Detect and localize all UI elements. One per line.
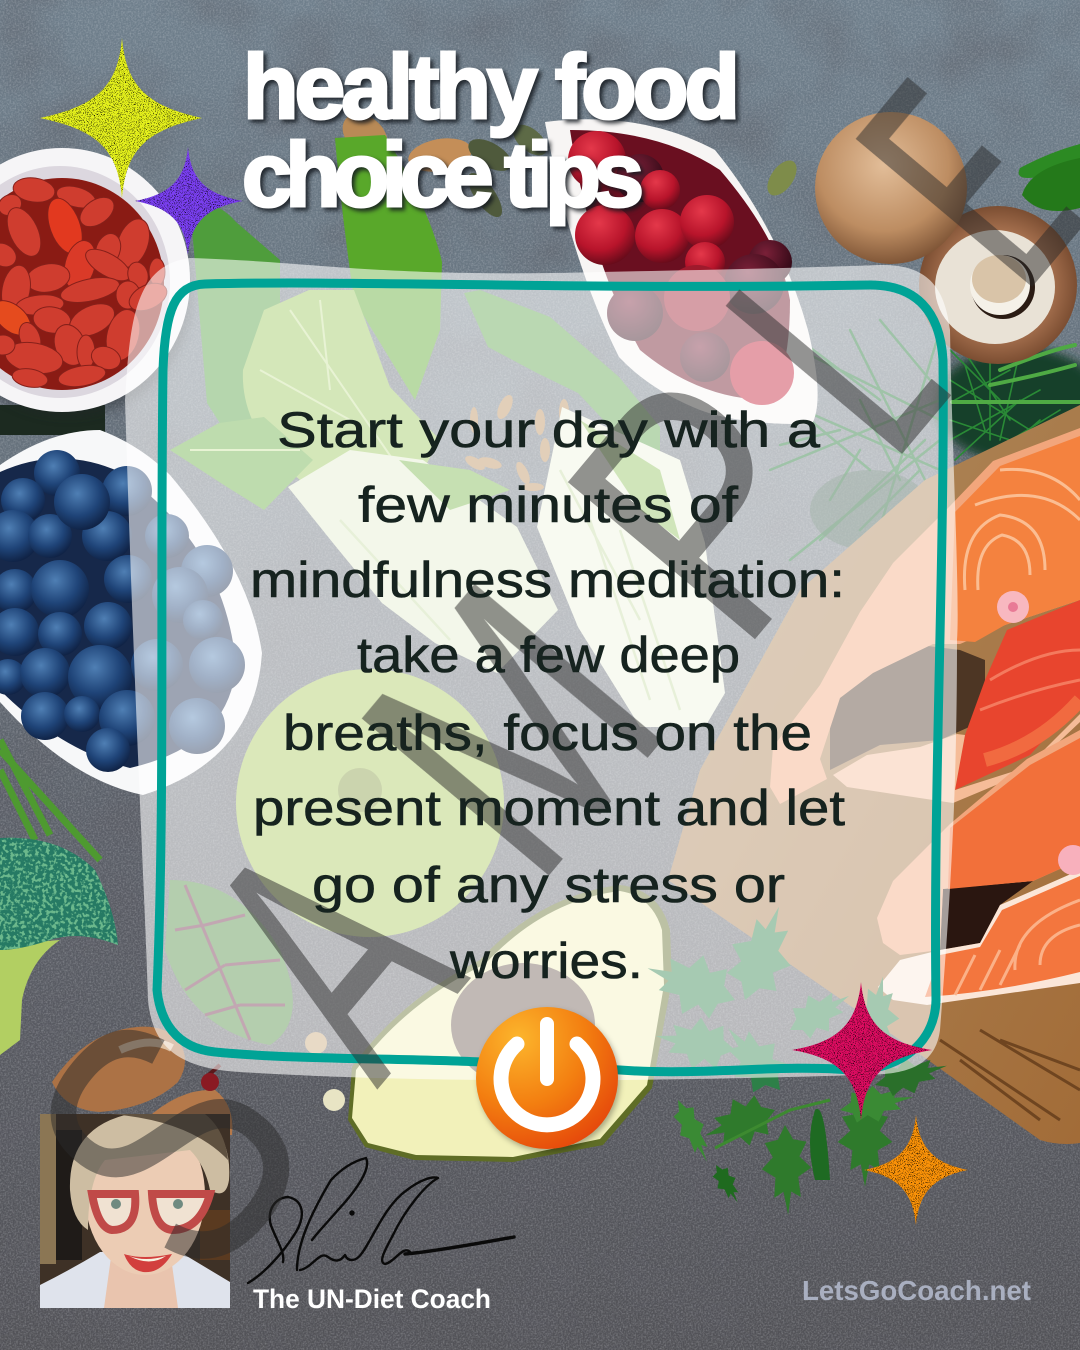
- watermark: SAMPLE: M: [289, 518, 734, 941]
- food: blueberry bowl: [0, 430, 262, 795]
- title: [242, 37, 740, 226]
- panel: frosted translucent card: [125, 258, 958, 1080]
- icon: purple sparkle: [135, 147, 243, 255]
- body text: mindfulness tip: breaths, focus on the: [283, 705, 812, 761]
- icon: power button: [476, 1007, 618, 1149]
- signature: [248, 1158, 514, 1283]
- icon: yellow sparkle: [40, 38, 202, 198]
- food: avocado: [305, 885, 672, 1162]
- food: seeds: [463, 393, 569, 491]
- body text: mindfulness tip: [250, 402, 845, 989]
- author label: The UN-Diet Coach: [253, 1284, 491, 1314]
- body text: mindfulness tip: present moment and let: [253, 780, 845, 836]
- food: parsley: [637, 896, 952, 1216]
- food: salmon steaks: [770, 428, 1080, 1005]
- portrait photo: [40, 1114, 230, 1308]
- body text: mindfulness tip: Start your day with a: [277, 402, 820, 458]
- food: almonds and pumpkin seeds: [334, 105, 802, 222]
- food: apple: [236, 669, 504, 937]
- body text: mindfulness tip: worries.: [449, 933, 643, 989]
- food: bok choy: [170, 135, 725, 727]
- icon: magenta sparkle: [792, 982, 932, 1120]
- body text: mindfulness tip: take a few deep: [357, 627, 740, 683]
- food: pecans: [52, 1027, 232, 1135]
- food: dill sprigs right: [935, 345, 1080, 463]
- food: cutting board: [668, 405, 1080, 1144]
- body text: mindfulness tip: few minutes of: [358, 477, 738, 533]
- title: choice tips: [242, 125, 644, 226]
- food: goji berry bowl: [0, 148, 193, 435]
- watermark: SAMPLE: L: [655, 190, 1017, 515]
- website label: LetsGoCoach.net: [802, 1275, 1031, 1306]
- food: dill under panel: [770, 320, 940, 560]
- food: scallions and broccoli: [0, 740, 118, 1055]
- icon: orange sparkle: [864, 1115, 968, 1225]
- body text: mindfulness tip: go of any stress or: [312, 857, 785, 913]
- food: mushrooms and green pepper: [815, 112, 1080, 364]
- panel: teal hand-drawn border: [157, 283, 943, 1072]
- title: healthy food: [243, 37, 740, 138]
- food: chard leaf: [165, 880, 293, 1045]
- watermark: SAMPLE: P: [495, 306, 920, 706]
- body text: mindfulness tip: mindfulness meditation:: [250, 552, 845, 608]
- food: cherry bowl: [545, 119, 818, 424]
- watermark: SAMPLE: A: [131, 770, 530, 1139]
